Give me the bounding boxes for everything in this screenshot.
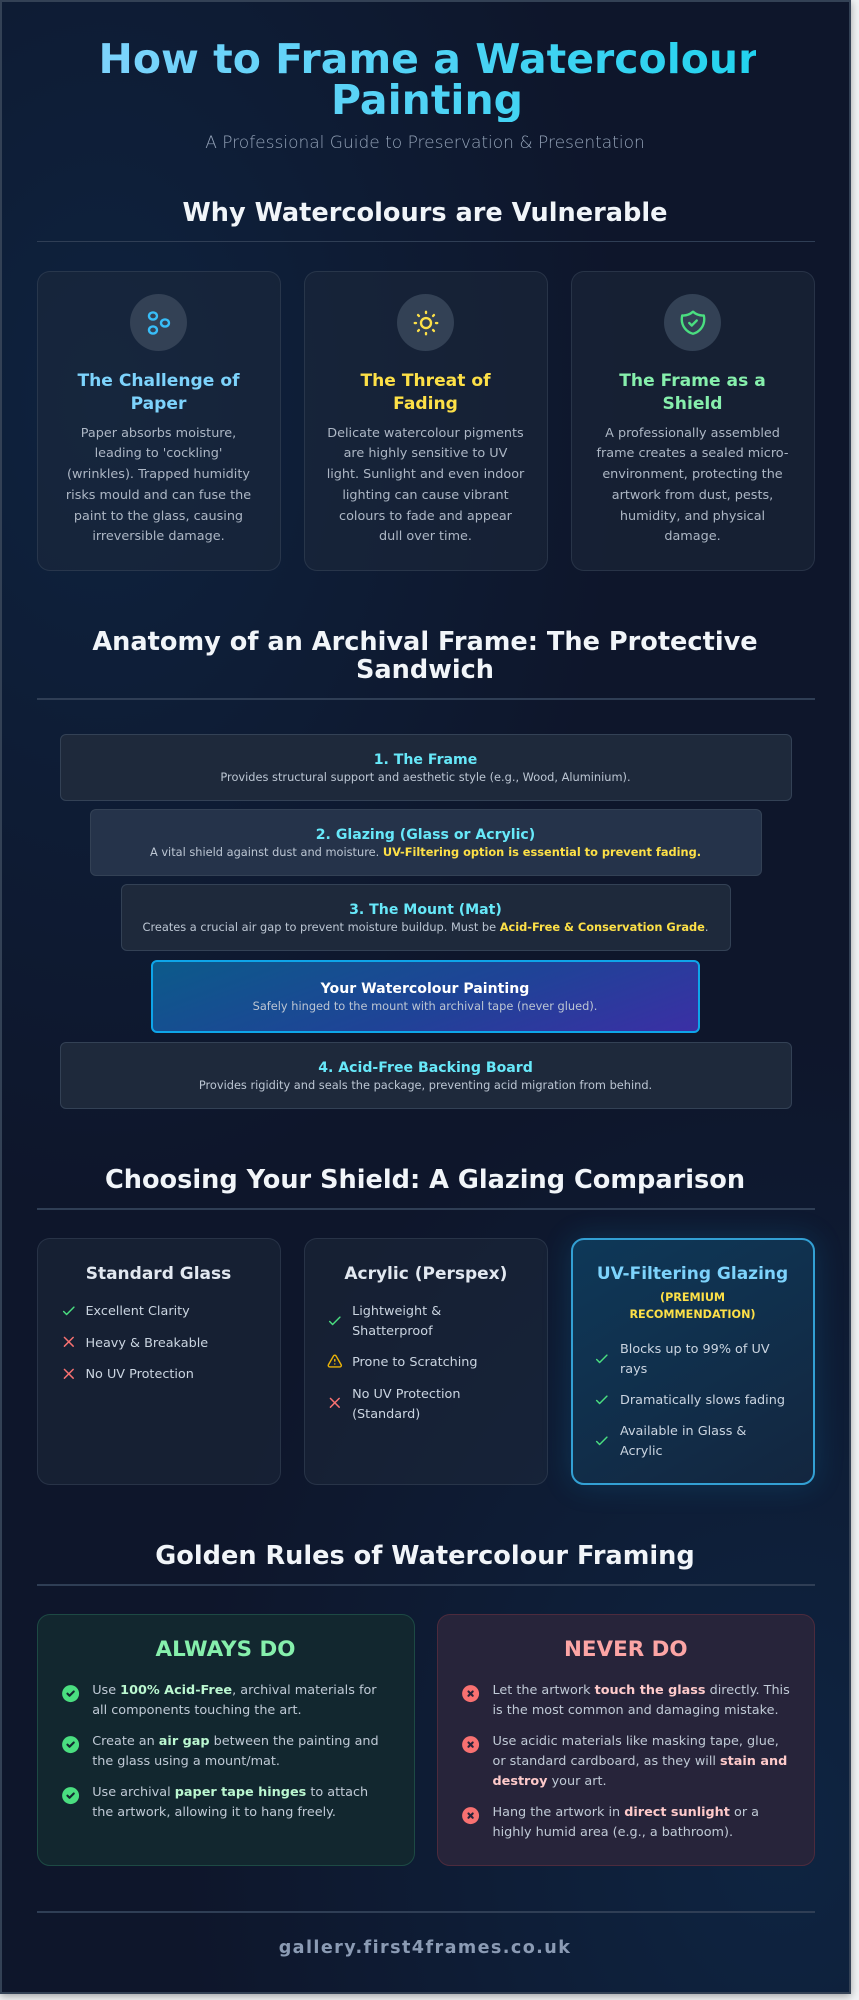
layer: the mount: 3. The Mount (Mat) [349,902,502,918]
item: blocks uv: Blocks up to 99% of UV [620,1342,770,1357]
item: heavy and breakable: Heavy & Breakable [85,1336,208,1351]
rule: paper tape hinges [62,1785,368,1820]
rule: acidic materials: destroy your art. [492,1774,607,1789]
text: paper description: (wrinkles). Trapped humidity [67,467,250,482]
heading: golden rules: Golden Rules of Watercolour Framing [155,1541,695,1571]
rule: paper tape hinges: the artwork, allowing it to hang freely. [92,1805,336,1820]
layer: the frame [60,734,792,800]
rule: direct sunlight: highly humid area (e.g., a bathroom). [492,1825,733,1840]
text: shield description: damage. [664,529,721,544]
item: lightweight: Lightweight & [352,1304,441,1319]
rule: touch the glass: is the most common and damaging mistake. [492,1702,779,1718]
heading: the challenge of paper: The Challenge of [77,370,240,390]
text: fading description [327,426,524,544]
heading: the frame as a shield: The Frame as a [619,370,766,390]
title: How to Frame a Watercolour [98,35,758,83]
heading: never do: NEVER DO [564,1637,688,1662]
layer: acid-free backing board: Provides rigidity and seals the package, preventing acid migration from behind. [199,1078,652,1092]
text: fading description: lighting can cause vibrant [342,488,509,503]
heading: choosing your shield: Choosing Your Shield: A Glazing Comparison [105,1165,745,1195]
text: fading description: are highly sensitive to UV [344,446,507,461]
text: fading description: light. Sunlight and even indoor [327,467,524,482]
badge: premium recommendation: (PREMIUM [660,1291,725,1304]
panel: always do [36,1614,414,1866]
panel: standard glass [36,1238,280,1484]
text: fading description: colours to fade and appear [339,509,512,524]
icon: paper rings [130,294,187,351]
layer: the mount [120,884,730,950]
panel: the challenge of paper [36,270,280,570]
layer: the frame: 1. The Frame [374,752,477,768]
heading: the threat of fading: The Threat of [360,370,491,390]
layer: your watercolour painting [150,960,700,1032]
heading: the challenge of paper: Paper [131,394,186,414]
text: fading description: Delicate watercolour pigments [327,426,524,441]
heading: standard glass: Standard Glass [86,1264,231,1284]
rule: acid-free: Use 100% Acid-Free, archival materials for [92,1682,377,1698]
text: shield description: artwork from dust, pests, [612,488,773,503]
text: paper description: risks mould and can fuse the [66,488,251,503]
text: shield description [596,426,788,544]
rule: touch the glass: Let the artwork touch the glass directly. This [492,1682,790,1698]
layer: the mount: Creates a crucial air gap to prevent moisture buildup. Must be Acid-Free & Conservation Grade. [143,920,708,934]
footer: website: gallery.first4frames.co.uk [279,1938,571,1958]
panel: the frame as a shield [570,270,814,570]
item: no uv protection standard: (Standard) [352,1406,420,1422]
heading: anatomy of an archival frame: Anatomy of an Archival Frame: The Protective [92,627,758,657]
rule: direct sunlight: Hang the artwork in direct sunlight or a [492,1805,759,1820]
icon: sun [397,294,454,351]
heading: always do: ALWAYS DO [156,1637,295,1662]
heading: the challenge of paper [77,370,240,414]
heading: acrylic: Acrylic (Perspex) [344,1264,507,1284]
item: no uv protection standard [330,1386,460,1422]
heading: the frame as a shield: Shield [662,394,723,414]
rule: touch the glass [462,1682,790,1718]
item: lightweight: Shatterproof [352,1324,433,1339]
heading: why watercolours are vulnerable: Why Watercolours are Vulnerable [183,198,667,228]
layer: your watercolour painting: Safely hinged to the mount with archival tape (never glued). [253,998,597,1012]
item: available in glass and acrylic [596,1424,746,1459]
item: no uv protection: No UV Protection [85,1367,194,1382]
item: blocks uv [596,1342,770,1377]
layer: glazing: 2. Glazing (Glass or Acrylic) [316,827,535,843]
text: paper description: Paper absorbs moisture, [81,426,236,441]
title: Painting [331,76,523,124]
text: shield description: frame creates a sealed micro- [596,446,788,461]
layer: acid-free backing board: 4. Acid-Free Backing Board [318,1060,533,1076]
heading: the frame as a shield [619,370,766,414]
layer: the frame: Provides structural support and aesthetic style (e.g., Wood, Aluminium). [220,770,631,784]
heading: the threat of fading [360,370,491,414]
rule: acid-free: all components touching the art. [92,1702,302,1718]
heading: anatomy of an archival frame: Sandwich [356,655,494,685]
item: slows fading: Dramatically slows fading [620,1393,785,1408]
item: prone to scratching: Prone to Scratching [352,1355,478,1370]
item: no uv protection standard: No UV Protection [352,1386,460,1402]
text: shield description: humidity, and physical [620,509,765,524]
text: shield description: A professionally assembled [605,426,780,441]
item: blocks uv: rays [620,1362,647,1377]
panel: never do [437,1614,815,1866]
panel: uv-filtering glazing [570,1238,814,1484]
icon: shield [664,294,721,351]
panel: the threat of fading [304,270,548,570]
text: paper description: leading to 'cockling' [95,446,222,461]
subtitle: A Professional Guide to Preservation & Presentation [205,133,645,153]
layer: glazing: A vital shield against dust and moisture. UV-Filtering option is essential to prevent fading. [150,844,701,858]
rule: acidic materials: or standard cardboard, as they will stain and [492,1754,787,1769]
heading: anatomy of an archival frame [92,627,758,685]
item: available in glass and acrylic: Available in Glass & [620,1424,746,1439]
rule: acid-free [62,1682,377,1718]
text: shield description: environment, protecting the [602,467,783,482]
item: excellent clarity: Excellent Clarity [85,1304,190,1319]
badge: premium recommendation: RECOMMENDATION) [629,1308,756,1321]
heading: the threat of fading: Fading [393,394,458,414]
badge: premium recommendation [629,1291,756,1321]
text: paper description: paint to the glass, causing [74,509,243,524]
rule: acidic materials: Use acidic materials like masking tape, glue, [492,1734,779,1749]
rule: direct sunlight [462,1805,759,1840]
panel: acrylic [304,1238,548,1484]
text: paper description: irreversible damage. [92,529,225,544]
heading: uv-filtering glazing: UV-Filtering Glazing [597,1264,788,1284]
rule: air gap: Create an air gap between the painting and [92,1734,379,1749]
rule: paper tape hinges: Use archival paper tape hinges to attach [92,1785,368,1800]
layer: acid-free backing board [60,1042,792,1108]
rule: acidic materials [462,1734,787,1789]
item: available in glass and acrylic: Acrylic [620,1444,663,1459]
layer: glazing [90,808,762,876]
rule: air gap: the glass using a mount/mat. [92,1754,280,1769]
item: lightweight [329,1304,441,1339]
text: paper description [66,426,251,544]
layer: your watercolour painting: Your Watercolour Painting [321,981,529,997]
title [98,39,756,122]
text: fading description: dull over time. [379,529,472,544]
rule: air gap [62,1734,379,1769]
